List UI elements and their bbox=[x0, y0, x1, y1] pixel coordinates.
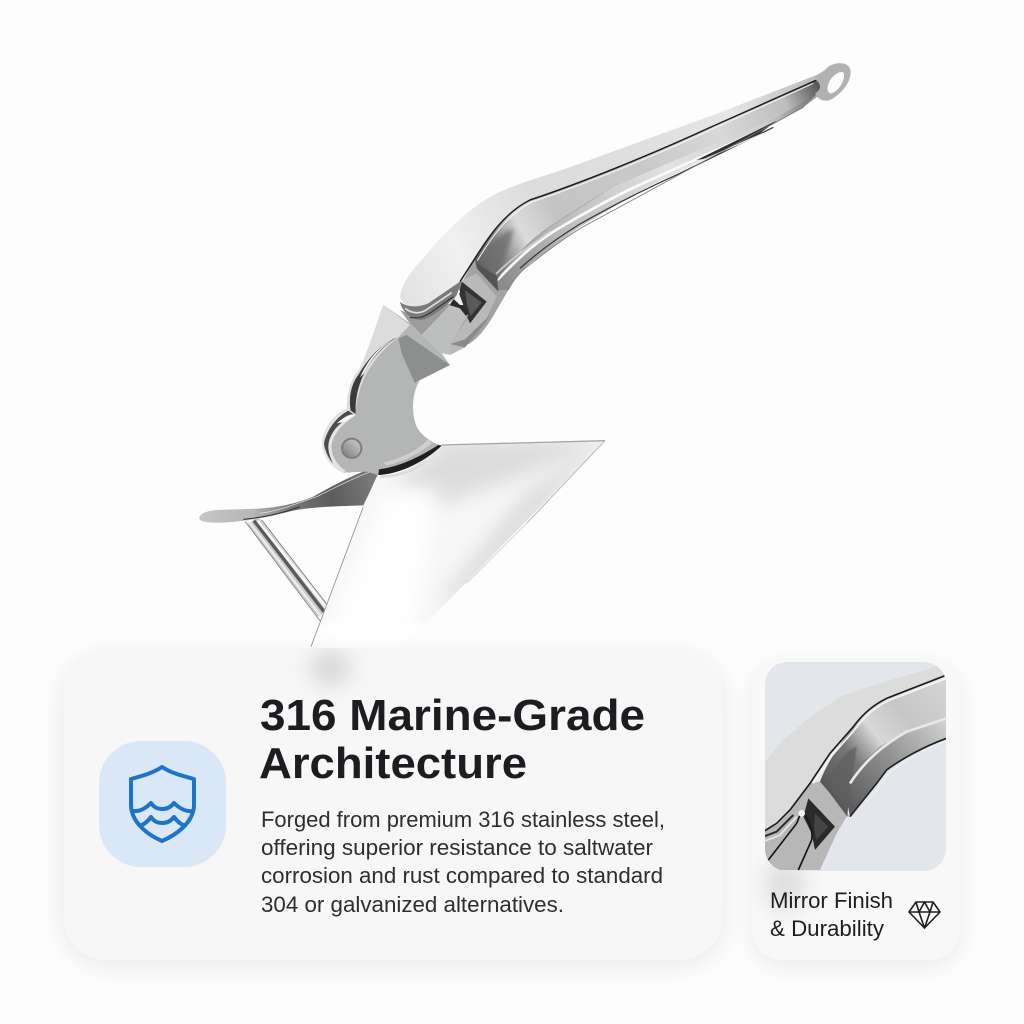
shaft mirror face bbox=[475, 81, 822, 292]
shaft top face bbox=[400, 70, 828, 307]
body text bbox=[261, 807, 665, 917]
heading: 316 Marine-Grade bbox=[260, 691, 645, 740]
panel: mirror finish card bbox=[752, 660, 960, 966]
icon: diamond bbox=[909, 902, 940, 928]
anchor roll bar rod bbox=[245, 520, 327, 621]
body text: Forged from premium 316 stainless steel, bbox=[261, 807, 665, 832]
shaft lower rail bbox=[497, 89, 822, 290]
inset: close-up of shaft bbox=[760, 662, 947, 871]
anchor shank lower body bbox=[322, 305, 450, 477]
body text: 304 or galvanized alternatives. bbox=[261, 892, 564, 917]
caption bbox=[770, 888, 893, 941]
anchor shaft bbox=[400, 63, 851, 346]
anchor lower assembly bbox=[199, 305, 607, 650]
caption: & Durability bbox=[770, 916, 884, 941]
shackle eye bbox=[815, 63, 851, 101]
anchor swivel joint bbox=[400, 273, 497, 355]
caption: Mirror Finish bbox=[770, 888, 893, 913]
shaft highlight line bbox=[460, 80, 817, 282]
heading: Architecture bbox=[259, 739, 527, 788]
panel: main info card bbox=[64, 648, 722, 964]
anchor left fluke bbox=[199, 467, 377, 523]
icon: shield with water waves bbox=[99, 741, 226, 867]
body text: offering superior resistance to saltwater bbox=[261, 835, 653, 860]
body text: corrosion and rust compared to standard bbox=[261, 863, 663, 888]
heading bbox=[259, 691, 645, 788]
anchor: polished stainless steel bbox=[199, 63, 851, 650]
shaft under silhouette bbox=[443, 80, 822, 346]
anchor main blade bbox=[307, 437, 607, 650]
